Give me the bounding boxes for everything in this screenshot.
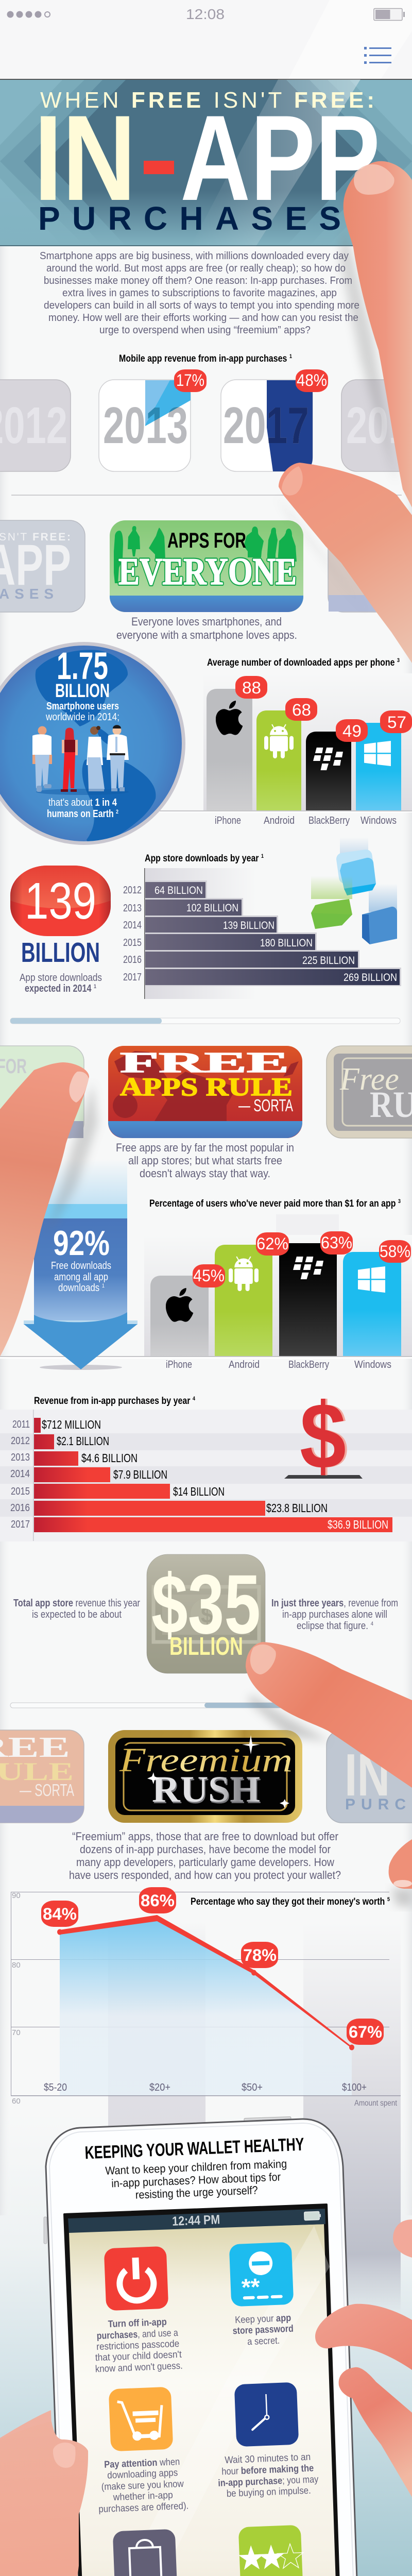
icon: 2013: 2013 bbox=[103, 397, 188, 454]
badge: 57: 57 bbox=[387, 713, 406, 732]
faded icon: in-app: PURC bbox=[345, 1796, 406, 1813]
description: Free downloads bbox=[51, 1260, 111, 1272]
bar 2012: 64 BILLION bbox=[154, 885, 203, 896]
banknote bbox=[153, 1587, 259, 1642]
axis labels: 90 bbox=[12, 1891, 21, 1900]
bar 2015: 180 BILLION bbox=[260, 937, 313, 949]
caption: free apps popular: all app stores; but what starts free bbox=[128, 1154, 282, 1167]
tip text: that your child doesn't bbox=[95, 2349, 182, 2363]
icon: 2012 bbox=[0, 380, 71, 471]
bar 2013: 2013 bbox=[11, 1452, 30, 1463]
hand: palm behind phone bbox=[0, 2410, 57, 2576]
featured icon: apps for everyone bbox=[110, 520, 303, 612]
bar 2013: $4.6 BILLION bbox=[81, 1451, 138, 1465]
bar 2016: 2016 bbox=[10, 1502, 30, 1514]
faded icon: in-app: SN'T FREE: bbox=[0, 531, 71, 543]
heading: app store downloads: 1 bbox=[261, 853, 264, 859]
finger: over paragraph bbox=[389, 1839, 412, 1906]
badge: 88: 88 bbox=[242, 679, 261, 697]
caption: everyone loves smartphones: Everyone loves smartphones, and bbox=[131, 615, 282, 628]
phone intro text: Want to keep your children from making bbox=[105, 2157, 287, 2177]
platform labels bbox=[215, 815, 397, 826]
35 figure: $35 bbox=[151, 1557, 261, 1651]
everyone text: EVERYONE bbox=[118, 551, 297, 593]
icon: 2017: 2017 bbox=[223, 397, 309, 454]
bar 2013: 102 BILLION bbox=[186, 902, 238, 914]
amount labels: $100+ bbox=[342, 2082, 367, 2093]
banknote: $ bbox=[201, 1603, 213, 1628]
paragraph: freemium: have users responded, and how can you protect your wallet? bbox=[69, 1869, 341, 1882]
icon: next year bbox=[341, 380, 412, 471]
app icon row: apps for everyone bbox=[0, 520, 412, 612]
arrow: 92% free downloads: 92% bbox=[53, 1224, 110, 1263]
globe: smartphone users: 2 bbox=[116, 809, 118, 815]
sorta text: — SORTA bbox=[238, 1096, 293, 1115]
badge: 62%: 62% bbox=[256, 1234, 288, 1253]
finger: top right bbox=[340, 161, 412, 507]
platform labels: Windows bbox=[354, 1359, 391, 1370]
heading: revenue by year: 4 bbox=[193, 1396, 196, 1402]
bar 2011: $712 MILLION bbox=[42, 1418, 101, 1431]
caption: free apps popular: Free apps are by far the most popular in bbox=[116, 1141, 294, 1154]
sparkles bbox=[147, 1735, 289, 1808]
amount labels: $5-20 bbox=[44, 2082, 67, 2093]
phone body bbox=[46, 2119, 361, 2576]
heading: app store downloads: App store downloads by year bbox=[145, 853, 281, 864]
phone intro text: in-app purchases? How about tips for bbox=[111, 2171, 281, 2190]
badge: 68 bbox=[285, 698, 317, 721]
description: among all app bbox=[54, 1272, 108, 1283]
one in four text: that's about 1 in 4 bbox=[48, 797, 117, 808]
platform labels: Android bbox=[264, 815, 295, 826]
bar 2017: $36.9 BILLION bbox=[328, 1518, 388, 1531]
faded icon: in-app: IN bbox=[345, 1741, 390, 1808]
arrow: 92% free downloads bbox=[24, 1159, 138, 1370]
finger one bbox=[393, 2219, 412, 2258]
description bbox=[51, 1260, 111, 1294]
total revenue text: Total app store revenue this year bbox=[13, 1598, 140, 1609]
icon: dollar sign: $ bbox=[302, 1383, 348, 1488]
grid lines bbox=[11, 1892, 401, 2096]
tip: turn off in-app purchases bbox=[95, 2246, 183, 2375]
platform labels: Android bbox=[229, 1359, 260, 1370]
heading: mobile app revenue: 1 bbox=[289, 353, 292, 360]
continents bbox=[36, 650, 156, 843]
person one bbox=[32, 726, 52, 792]
tip text bbox=[95, 2317, 183, 2375]
bar 2015: 2015 bbox=[11, 1486, 30, 1497]
tip text: purchases, and use a bbox=[96, 2328, 178, 2342]
badge: 78%: 78% bbox=[243, 1946, 277, 1964]
tip text bbox=[98, 2456, 189, 2515]
phone bbox=[44, 2116, 361, 2576]
rush text: RUSH bbox=[152, 1769, 260, 1810]
intro paragraph: money. How well are their efforts working — and how can you resist the bbox=[48, 312, 358, 324]
bar: Android bbox=[256, 710, 301, 810]
bar 2014: $7.9 BILLION bbox=[113, 1468, 167, 1481]
tip text: purchases are offered). bbox=[98, 2501, 189, 2515]
intro paragraph: urge to overspend when using “freemium” apps? bbox=[99, 325, 311, 336]
faded icon: free apps rule bbox=[0, 1730, 84, 1823]
bar 2012 bbox=[123, 880, 207, 899]
icon: password: ** bbox=[241, 2273, 261, 2300]
badge: 45%: 45% bbox=[193, 1266, 225, 1285]
badge: 17%: 17% bbox=[176, 371, 204, 389]
badge: 49 bbox=[336, 719, 368, 742]
billion label: BILLION bbox=[55, 680, 110, 701]
bar 2015 bbox=[123, 933, 317, 951]
tip: pay attention bbox=[98, 2387, 189, 2515]
faded icon: in-app bbox=[327, 1730, 412, 1823]
title word PURCHASES: PURCHASES bbox=[38, 200, 341, 237]
hand: right fingers on phone bbox=[315, 2219, 412, 2497]
tip text: Wait 30 minutes to an bbox=[225, 2452, 311, 2466]
tip text: Pay attention when bbox=[104, 2456, 180, 2470]
badge: 86%: 86% bbox=[141, 1891, 175, 1910]
description: 1 bbox=[102, 1283, 105, 1289]
icon: shopping bag bbox=[113, 2529, 177, 2576]
bar 2015: $14 BILLION bbox=[173, 1485, 225, 1498]
three years text: In just three years, revenue from bbox=[271, 1598, 398, 1609]
platform labels: iPhone bbox=[166, 1359, 192, 1370]
badge: 57 bbox=[380, 710, 412, 733]
faded icon: in-app bbox=[0, 520, 85, 612]
icon: falling app cubes bbox=[311, 837, 397, 944]
tip text: a secret. bbox=[247, 2335, 280, 2347]
icon: 2013: 2013 bbox=[103, 397, 188, 454]
red trend line bbox=[57, 1915, 354, 2050]
person three bbox=[87, 726, 105, 791]
title word IN: IN bbox=[34, 90, 136, 226]
badge: 49: 49 bbox=[342, 722, 362, 740]
tip text: (make sure you know bbox=[101, 2479, 184, 2493]
freemium script: Freemium bbox=[119, 1741, 293, 1779]
bar 2014: 2014 bbox=[10, 1468, 30, 1480]
platform labels: BlackBerry bbox=[288, 1359, 329, 1370]
bar: Android bbox=[215, 1245, 272, 1356]
amount labels bbox=[44, 2082, 367, 2093]
caption: free apps popular bbox=[116, 1141, 294, 1180]
total revenue text: is expected to be about bbox=[32, 1609, 122, 1620]
featured icon: freemium rush bbox=[108, 1730, 302, 1823]
platform labels: BlackBerry bbox=[308, 815, 350, 826]
tip text: Turn off in-app bbox=[108, 2317, 167, 2330]
phone heading: KEEPING YOUR WALLET HEALTHY bbox=[84, 2134, 304, 2163]
bar 2013 bbox=[123, 898, 243, 917]
badge: 48%: 48% bbox=[297, 371, 327, 389]
finger two bbox=[315, 2304, 412, 2370]
tip: special offers bbox=[110, 2529, 184, 2576]
person two bbox=[61, 727, 78, 792]
apps rule text: APPS RULE bbox=[120, 1072, 293, 1101]
hand: second finger and palm bbox=[276, 463, 412, 663]
tip text bbox=[218, 2452, 319, 2499]
description bbox=[20, 972, 102, 994]
tip text: whether in-app bbox=[112, 2490, 173, 2503]
free text: FREE bbox=[120, 1047, 289, 1079]
section divider bbox=[11, 495, 402, 496]
globe: smartphone users bbox=[0, 642, 185, 845]
tip text: downloading apps bbox=[107, 2467, 178, 2481]
bar 2011: 2011 bbox=[12, 1419, 30, 1430]
progress bar one bbox=[10, 1018, 400, 1024]
tip text: hour before making the bbox=[221, 2463, 314, 2478]
amount labels: $20+ bbox=[149, 2082, 170, 2093]
tip text bbox=[232, 2313, 294, 2347]
heading: revenue by year: Revenue from in-app purchases by year bbox=[34, 1396, 220, 1406]
badge: 68: 68 bbox=[292, 701, 311, 719]
bar 2013: 2013 bbox=[123, 903, 142, 914]
axis labels: 60 bbox=[12, 2097, 21, 2106]
chart heading: 5 bbox=[387, 1896, 390, 1903]
1.75 figure: 1.75 bbox=[57, 645, 108, 687]
phone intro text bbox=[105, 2157, 287, 2201]
screen clock: 12:44 PM bbox=[172, 2212, 220, 2229]
four people illustration bbox=[32, 725, 129, 795]
bar chart: downloads by year bbox=[123, 868, 401, 999]
icon: 35 billion bbox=[147, 1554, 265, 1673]
bar 2012: 2012 bbox=[123, 885, 142, 896]
hand: left hand holding phone bbox=[0, 2421, 88, 2576]
bar 2016: 2016 bbox=[123, 954, 142, 965]
tip: wait 30 minutes bbox=[218, 2382, 319, 2499]
bar 2014 bbox=[123, 916, 278, 934]
bar: BlackBerry bbox=[279, 1243, 337, 1356]
bar 2014: 139 BILLION bbox=[223, 920, 274, 931]
faded icon: freemium rush: Free bbox=[339, 1062, 399, 1097]
everyone text: EVERYONE bbox=[118, 551, 297, 593]
bar 2012: $2.1 BILLION bbox=[57, 1434, 109, 1448]
apps for text: APPS FOR bbox=[167, 528, 246, 552]
bar chart: never paid more bbox=[0, 1214, 412, 1370]
globe: smartphone users: worldwide in 2014; bbox=[45, 711, 119, 723]
bar: Windows bbox=[343, 1252, 401, 1356]
callout: 139 billion bbox=[10, 866, 111, 994]
smartphone users text: Smartphone users bbox=[46, 701, 119, 712]
total revenue text bbox=[13, 1598, 140, 1620]
tip text: store password bbox=[232, 2324, 294, 2336]
tip: keep password secret bbox=[229, 2242, 294, 2347]
paragraph: freemium bbox=[69, 1830, 341, 1882]
heading: mobile app revenue: Mobile app revenue from in-app purchases bbox=[119, 353, 318, 364]
app icon row: freemium rush bbox=[0, 1730, 412, 1823]
axis labels: 70 bbox=[12, 2028, 21, 2037]
bar 2017 bbox=[11, 1517, 392, 1532]
app icon row: free apps rule bbox=[0, 1046, 412, 1138]
signal dots bbox=[7, 11, 50, 18]
title hyphen bbox=[144, 161, 174, 174]
red app badge: 139 bbox=[25, 872, 96, 930]
badge: 86% bbox=[139, 1887, 176, 1913]
description: expected in 2014 bbox=[25, 983, 107, 994]
bar 2011 bbox=[12, 1418, 101, 1433]
tip text: restrictions passcode bbox=[96, 2338, 180, 2352]
intro paragraph bbox=[40, 250, 359, 336]
bar 2016 bbox=[123, 950, 359, 969]
bar 2015 bbox=[11, 1484, 225, 1499]
app icon row: years bbox=[0, 369, 412, 471]
platform labels: Windows bbox=[360, 815, 397, 826]
bar 2017: 2017 bbox=[11, 1519, 30, 1530]
icon: dollar sign: $ bbox=[300, 1383, 346, 1488]
person four bbox=[107, 725, 129, 791]
tip text: Keep your app bbox=[235, 2313, 291, 2326]
tip text: be buying on impulse. bbox=[226, 2485, 311, 2499]
tip: read reviews bbox=[237, 2525, 306, 2576]
status bar bbox=[0, 0, 412, 79]
hero banner bbox=[0, 79, 412, 246]
tip text: in-app purchase; you may bbox=[218, 2474, 319, 2489]
fingernail bbox=[354, 164, 394, 195]
screen battery bbox=[304, 2211, 321, 2221]
bar 2016: $23.8 BILLION bbox=[266, 1501, 328, 1515]
title line one: WHEN FREE ISN'T FREE: bbox=[40, 88, 374, 113]
intro paragraph: developers can build in all sorts of ways to tempt you into spending more bbox=[44, 300, 359, 311]
callout: 35 billion bbox=[13, 1554, 398, 1673]
tip text: know and won't guess. bbox=[95, 2361, 183, 2375]
icon: 2017: 2017 bbox=[223, 397, 309, 454]
bar 2014 bbox=[10, 1467, 167, 1482]
bar 2012 bbox=[11, 1434, 109, 1449]
billion label: BILLION bbox=[169, 1633, 243, 1660]
caption: everyone loves smartphones bbox=[116, 615, 297, 641]
line chart: money's worth bbox=[11, 1887, 401, 2313]
three years text: in-app purchases alone will bbox=[282, 1609, 387, 1620]
finger three bbox=[339, 2367, 412, 2497]
intro paragraph: around the world. But most apps are free (or really cheap); so how do bbox=[46, 263, 346, 274]
badge: 84%: 84% bbox=[43, 1905, 77, 1923]
bar 2017: 269 BILLION bbox=[344, 972, 397, 984]
amount labels: $50+ bbox=[242, 2082, 263, 2093]
globe: smartphone users: humans on Earth bbox=[47, 808, 131, 820]
progress bar two bbox=[10, 1703, 402, 1708]
featured icon: free apps rule bbox=[108, 1046, 302, 1138]
paragraph: freemium: dozens of in-app purchases, have become the model for bbox=[80, 1843, 331, 1856]
caption: free apps popular: doesn't always stay that way. bbox=[140, 1167, 270, 1180]
intro paragraph: extra lives in games to subscriptions to favorite magazines, app bbox=[62, 287, 337, 299]
finger: over 35 billion icon bbox=[246, 1642, 412, 1788]
phone intro text: resisting the urge yourself? bbox=[135, 2183, 258, 2201]
paragraph: freemium: many app developers, particularly game developers. How bbox=[76, 1856, 334, 1869]
starburst background bbox=[114, 1051, 299, 1121]
menu icon bbox=[364, 47, 391, 64]
faded icon: free apps rule: — SORTA bbox=[20, 1781, 74, 1800]
icon: shopping cart bbox=[109, 2387, 173, 2451]
three years text: eclipse that figure. bbox=[297, 1620, 380, 1632]
axis labels: 80 bbox=[12, 1961, 21, 1970]
clock: 12:08 bbox=[186, 6, 225, 22]
bar 2016: 225 BILLION bbox=[302, 955, 355, 967]
rush text: RUSH bbox=[153, 1770, 261, 1811]
faded icon: apps for everyone bbox=[0, 1046, 84, 1138]
icon: star rating bbox=[237, 2525, 304, 2576]
description: App store downloads bbox=[20, 972, 102, 984]
bar: BlackBerry bbox=[306, 732, 351, 810]
faded icon: freemium rush bbox=[327, 1046, 412, 1138]
red app badge bbox=[10, 866, 111, 936]
icon: 2017 bbox=[221, 380, 313, 471]
faded icon: in-app: ASES bbox=[0, 586, 54, 602]
intro paragraph: Smartphone apps are big business, with millions downloaded every day bbox=[40, 250, 349, 262]
battery icon bbox=[374, 8, 405, 21]
badge: 67% bbox=[347, 2019, 384, 2045]
intro paragraph: businesses make money off them? One reason: In-app purchases. From bbox=[44, 275, 352, 286]
badge: 78% bbox=[241, 1942, 278, 1968]
axis labels bbox=[12, 1891, 21, 2106]
badge: 58%: 58% bbox=[380, 1242, 410, 1261]
bar chart: revenue by year bbox=[0, 1383, 412, 1541]
finger: over faded icon bbox=[0, 1062, 98, 1357]
phone screen bbox=[64, 2205, 341, 2576]
bar: iPhone bbox=[150, 1276, 209, 1356]
billion label: BILLION bbox=[21, 937, 100, 968]
icon: password bbox=[229, 2242, 294, 2307]
bar 2017 bbox=[123, 968, 401, 986]
paragraph: freemium: “Freemium” apps, those that are free to download but offer bbox=[72, 1830, 338, 1843]
line chart: money's worth: Amount spent bbox=[354, 2099, 397, 2108]
faded icon: free apps bbox=[328, 520, 412, 612]
bar: Windows bbox=[356, 723, 401, 810]
platform labels bbox=[166, 1359, 391, 1370]
phone buttons bbox=[44, 2116, 291, 2244]
bar 2014: 2014 bbox=[123, 920, 142, 931]
bar 2017: 2017 bbox=[123, 972, 142, 983]
people silhouettes bbox=[114, 526, 297, 583]
icon: 2013 bbox=[99, 380, 191, 471]
description: 1 bbox=[94, 984, 96, 990]
heading: average number of apps: 3 bbox=[397, 657, 400, 664]
three years text bbox=[271, 1598, 398, 1632]
badge: 63%: 63% bbox=[321, 1233, 352, 1252]
bar 2015: 2015 bbox=[123, 937, 142, 948]
bar 2013 bbox=[11, 1451, 138, 1466]
badge: 88 bbox=[235, 676, 267, 699]
bar 2016 bbox=[10, 1501, 328, 1516]
three years text: 4 bbox=[371, 1621, 373, 1627]
bar chart: apps per phone bbox=[160, 673, 412, 826]
badge: 67%: 67% bbox=[349, 2023, 382, 2041]
icon: power bbox=[104, 2246, 168, 2311]
icon: dollar sign bbox=[284, 1383, 363, 1488]
bar 2012: 2012 bbox=[11, 1435, 30, 1447]
heading: never paid more than $1: 3 bbox=[398, 1198, 401, 1205]
caption: everyone loves smartphones: everyone with a smartphone loves apps. bbox=[116, 629, 297, 641]
icon: clock bbox=[234, 2382, 299, 2447]
platform labels: iPhone bbox=[215, 815, 241, 826]
badge: 84% bbox=[41, 1901, 78, 1927]
area under the line bbox=[60, 1919, 352, 2095]
description: downloads bbox=[58, 1282, 108, 1294]
bar: iPhone bbox=[207, 689, 252, 810]
